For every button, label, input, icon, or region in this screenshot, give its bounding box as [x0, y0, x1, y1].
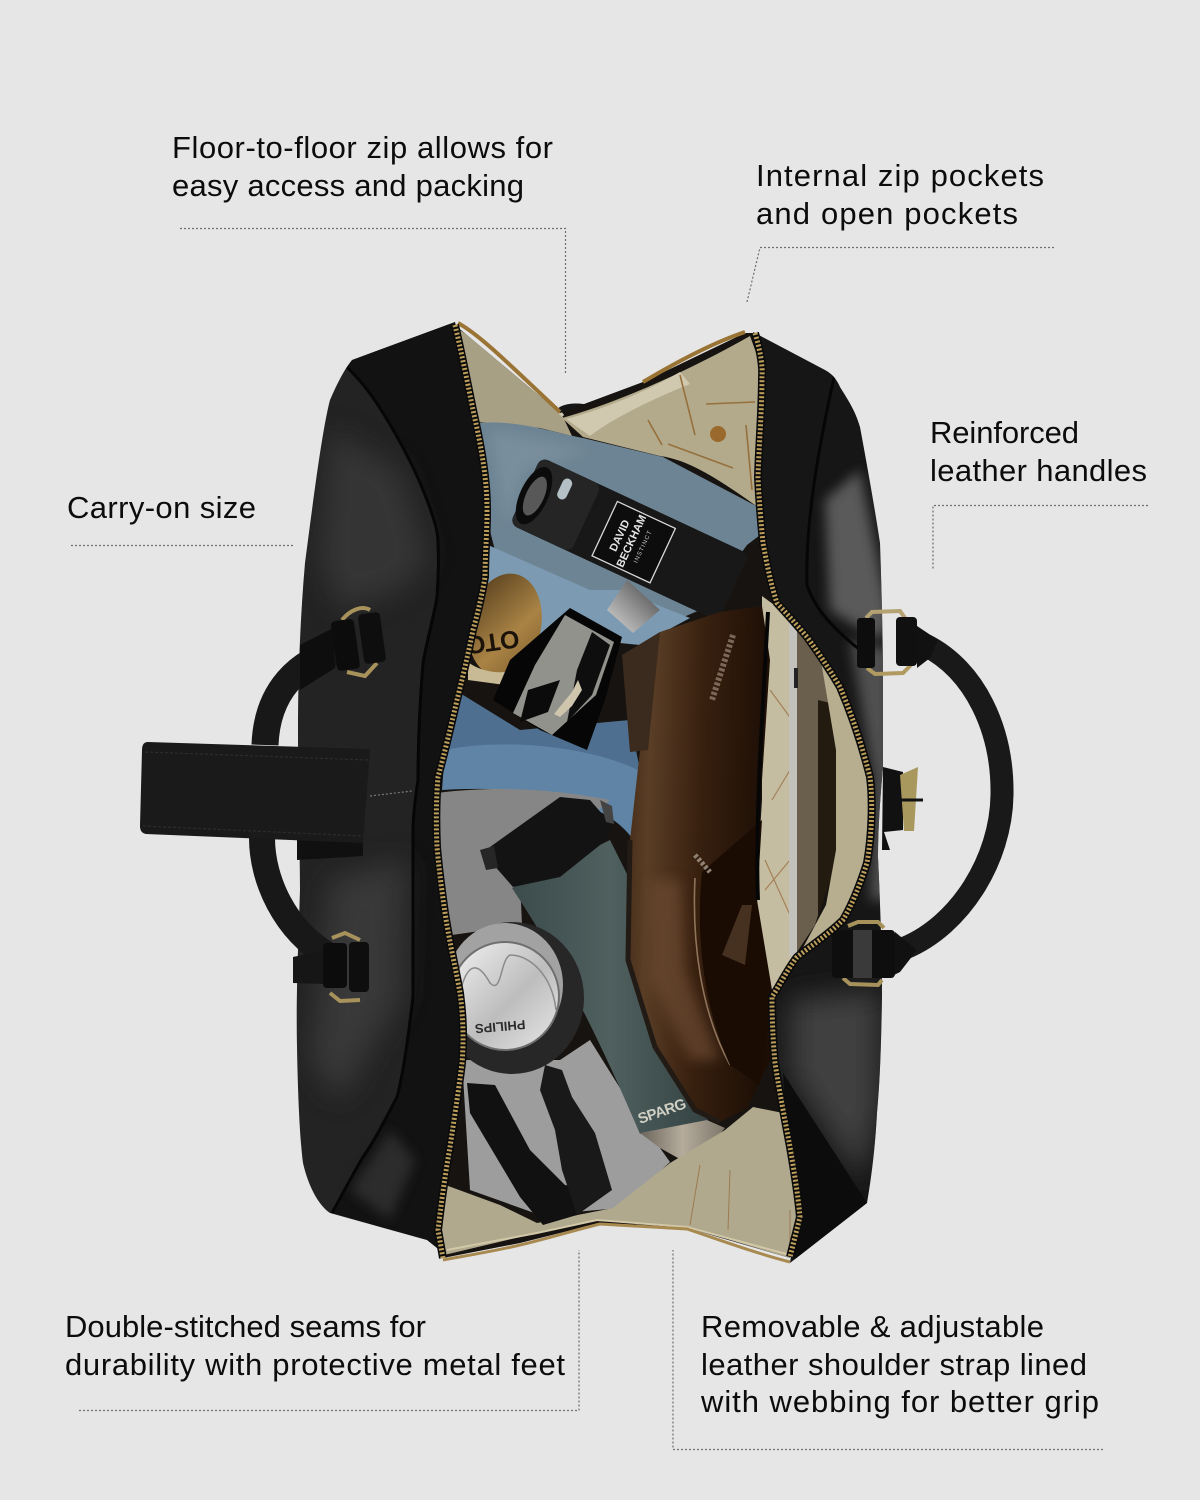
callout: leather handles	[930, 415, 1148, 570]
right zipper	[755, 333, 872, 1257]
callout: shoulder strap	[673, 1250, 1103, 1450]
cosmetic tin	[468, 574, 542, 684]
callout: floor-to-floor zip: easy access and packing	[172, 168, 524, 203]
denim jacket, lower	[442, 744, 642, 838]
denim collar seam	[486, 545, 690, 650]
callout: internal pockets: Internal zip pockets	[756, 158, 1044, 193]
left zipper	[436, 325, 487, 1258]
deodorant can: BECKHAM	[615, 513, 649, 569]
callout: double-stitched seams	[65, 1250, 579, 1410]
infographic canvas	[66, 136, 1148, 1450]
callout: floor-to-floor zip	[172, 130, 566, 375]
headphones	[440, 922, 612, 1225]
callout: internal pockets	[747, 158, 1054, 302]
left handle	[262, 608, 386, 1001]
callout: leather handles: Reinforced	[930, 415, 1079, 450]
bag illustration	[140, 320, 1002, 1270]
top right lining	[562, 336, 766, 510]
callout: double-stitched seams: durability with protective metal feet	[65, 1347, 565, 1382]
bottom lining	[440, 1107, 802, 1258]
callout: shoulder strap: with webbing for better grip	[700, 1384, 1099, 1419]
cosmetic tin: OTOM	[443, 624, 521, 662]
open pocket flap	[803, 665, 868, 948]
water bottle	[480, 797, 725, 1158]
deodorant can: INSTINCT	[633, 529, 654, 564]
leather strap tab	[140, 742, 412, 860]
right handle	[892, 626, 1002, 976]
strap peeking behind opening	[555, 404, 592, 418]
top left lining	[457, 328, 572, 436]
water bottle logo: SPARG	[636, 1095, 689, 1128]
bag interior	[430, 320, 880, 1270]
top zip edge	[458, 323, 745, 412]
callout: carry-on size: Carry-on size	[67, 490, 256, 525]
grey hoodie, lower	[462, 1040, 670, 1215]
cologne bottle	[493, 580, 660, 750]
callout: shoulder strap: Removable & adjustable	[701, 1309, 1044, 1344]
inner pocket lining	[757, 596, 793, 990]
laptop in pocket	[789, 618, 838, 956]
denim light patch	[496, 436, 566, 502]
headphones: PHILIPS	[474, 1017, 526, 1036]
callout: floor-to-floor zip: Floor-to-floor zip allows for	[172, 130, 553, 165]
right buckle hardware	[832, 611, 923, 985]
left leather panel	[297, 322, 500, 1256]
denim dark shadow	[448, 690, 640, 770]
deodorant can	[512, 460, 742, 612]
denim jacket, upper	[480, 422, 758, 616]
callout: double-stitched seams: Double-stitched seams for	[65, 1309, 426, 1344]
callout: internal pockets: and open pockets	[756, 196, 1018, 231]
bottom zipper	[443, 1224, 790, 1262]
callout: shoulder strap: leather shoulder strap lined	[701, 1347, 1087, 1382]
loafer shoe	[622, 606, 772, 1122]
grey hoodie, upper	[437, 789, 610, 935]
deodorant can: DAVID	[608, 518, 633, 553]
callout: leather handles: leather handles	[930, 453, 1147, 488]
right leather panel	[753, 332, 890, 1263]
